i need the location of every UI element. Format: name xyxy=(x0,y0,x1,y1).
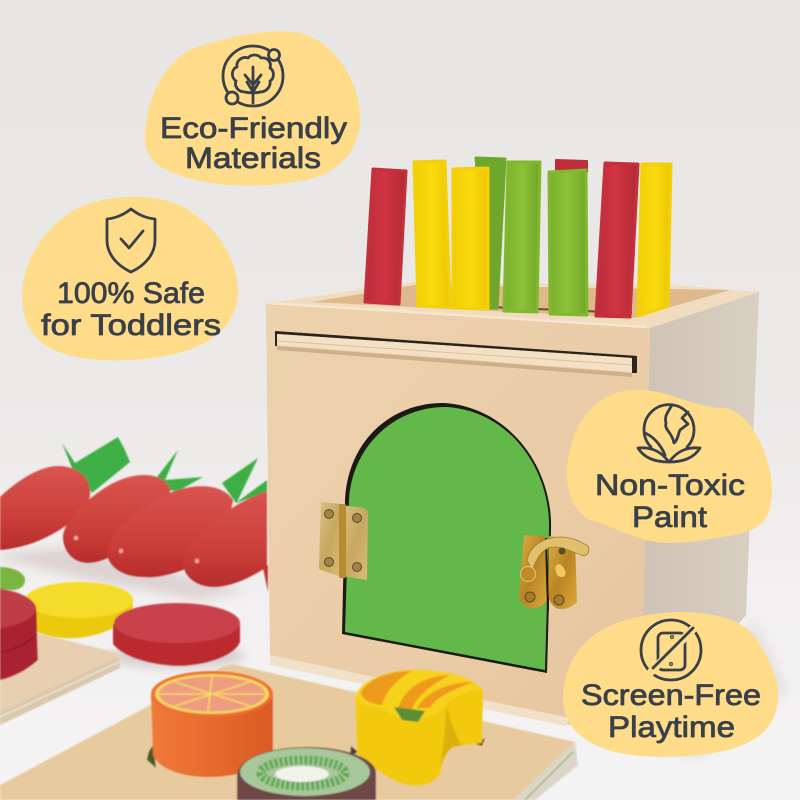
carrot shadows xyxy=(0,548,265,600)
heading: for Toddlers xyxy=(41,309,221,342)
wooden pegs xyxy=(365,158,671,317)
icon: globe with leaves xyxy=(638,405,700,462)
badge blob xyxy=(563,612,778,757)
badge: 100% safe for toddlers xyxy=(22,197,238,360)
heading: Paint xyxy=(632,501,708,534)
board top xyxy=(0,633,118,714)
heading: Playtime xyxy=(608,711,735,744)
back pegs xyxy=(476,158,587,308)
red disc xyxy=(109,603,245,668)
carrot 2 xyxy=(63,475,170,563)
badge: non-toxic paint xyxy=(567,390,772,543)
wooden sorting box xyxy=(266,158,759,740)
heading: Screen-Free xyxy=(581,679,761,712)
yellow peg 7 xyxy=(638,164,671,316)
board edge xyxy=(0,657,120,725)
yellow disc xyxy=(24,582,133,638)
icon: crossed-out phone xyxy=(641,620,701,680)
red peg 6 xyxy=(596,163,638,317)
heading xyxy=(581,679,761,744)
banana fruit piece xyxy=(350,670,485,786)
brass hinge xyxy=(319,502,368,580)
heading xyxy=(160,112,347,175)
carrots xyxy=(0,437,268,600)
green peg 5 xyxy=(549,170,587,315)
yellow peg 3 xyxy=(453,168,488,309)
small wooden board, left xyxy=(0,589,120,725)
kiwi fruit piece xyxy=(237,747,376,800)
box top xyxy=(267,282,759,328)
large wooden board with fruit xyxy=(0,664,578,800)
heading xyxy=(41,277,221,342)
badge blob xyxy=(145,31,360,186)
red peg 1 xyxy=(365,169,406,304)
discs on table xyxy=(0,567,245,668)
badge: eco-friendly materials xyxy=(145,31,360,186)
badge: screen-free playtime xyxy=(563,612,778,757)
brass latch xyxy=(519,535,589,610)
green disc xyxy=(0,567,25,590)
heading: Materials xyxy=(185,142,321,175)
box right face xyxy=(640,292,759,740)
heading: Eco-Friendly xyxy=(160,112,347,145)
carrot 1 xyxy=(0,466,90,550)
board edge xyxy=(513,742,578,800)
badge blob xyxy=(567,390,772,543)
carrot leaves xyxy=(62,437,267,503)
slot rail xyxy=(275,331,637,377)
badge blob xyxy=(22,197,238,360)
icon: shield with check xyxy=(107,209,155,272)
carrot 4 xyxy=(183,491,267,587)
icon: tree in orbit xyxy=(223,46,283,106)
box front face xyxy=(266,303,650,740)
box interior top xyxy=(312,285,730,318)
red stacked discs xyxy=(0,589,38,680)
board top surface xyxy=(0,664,575,800)
green peg 4 xyxy=(504,162,540,312)
orange fruit piece xyxy=(147,671,273,777)
heading xyxy=(595,469,745,534)
plywood bottom edge xyxy=(270,655,570,726)
heading: Non-Toxic xyxy=(595,469,745,502)
yellow peg 2 xyxy=(414,161,450,307)
carrot 3 xyxy=(107,486,233,577)
heading: 100% Safe xyxy=(57,277,205,310)
green arched door xyxy=(342,403,551,673)
